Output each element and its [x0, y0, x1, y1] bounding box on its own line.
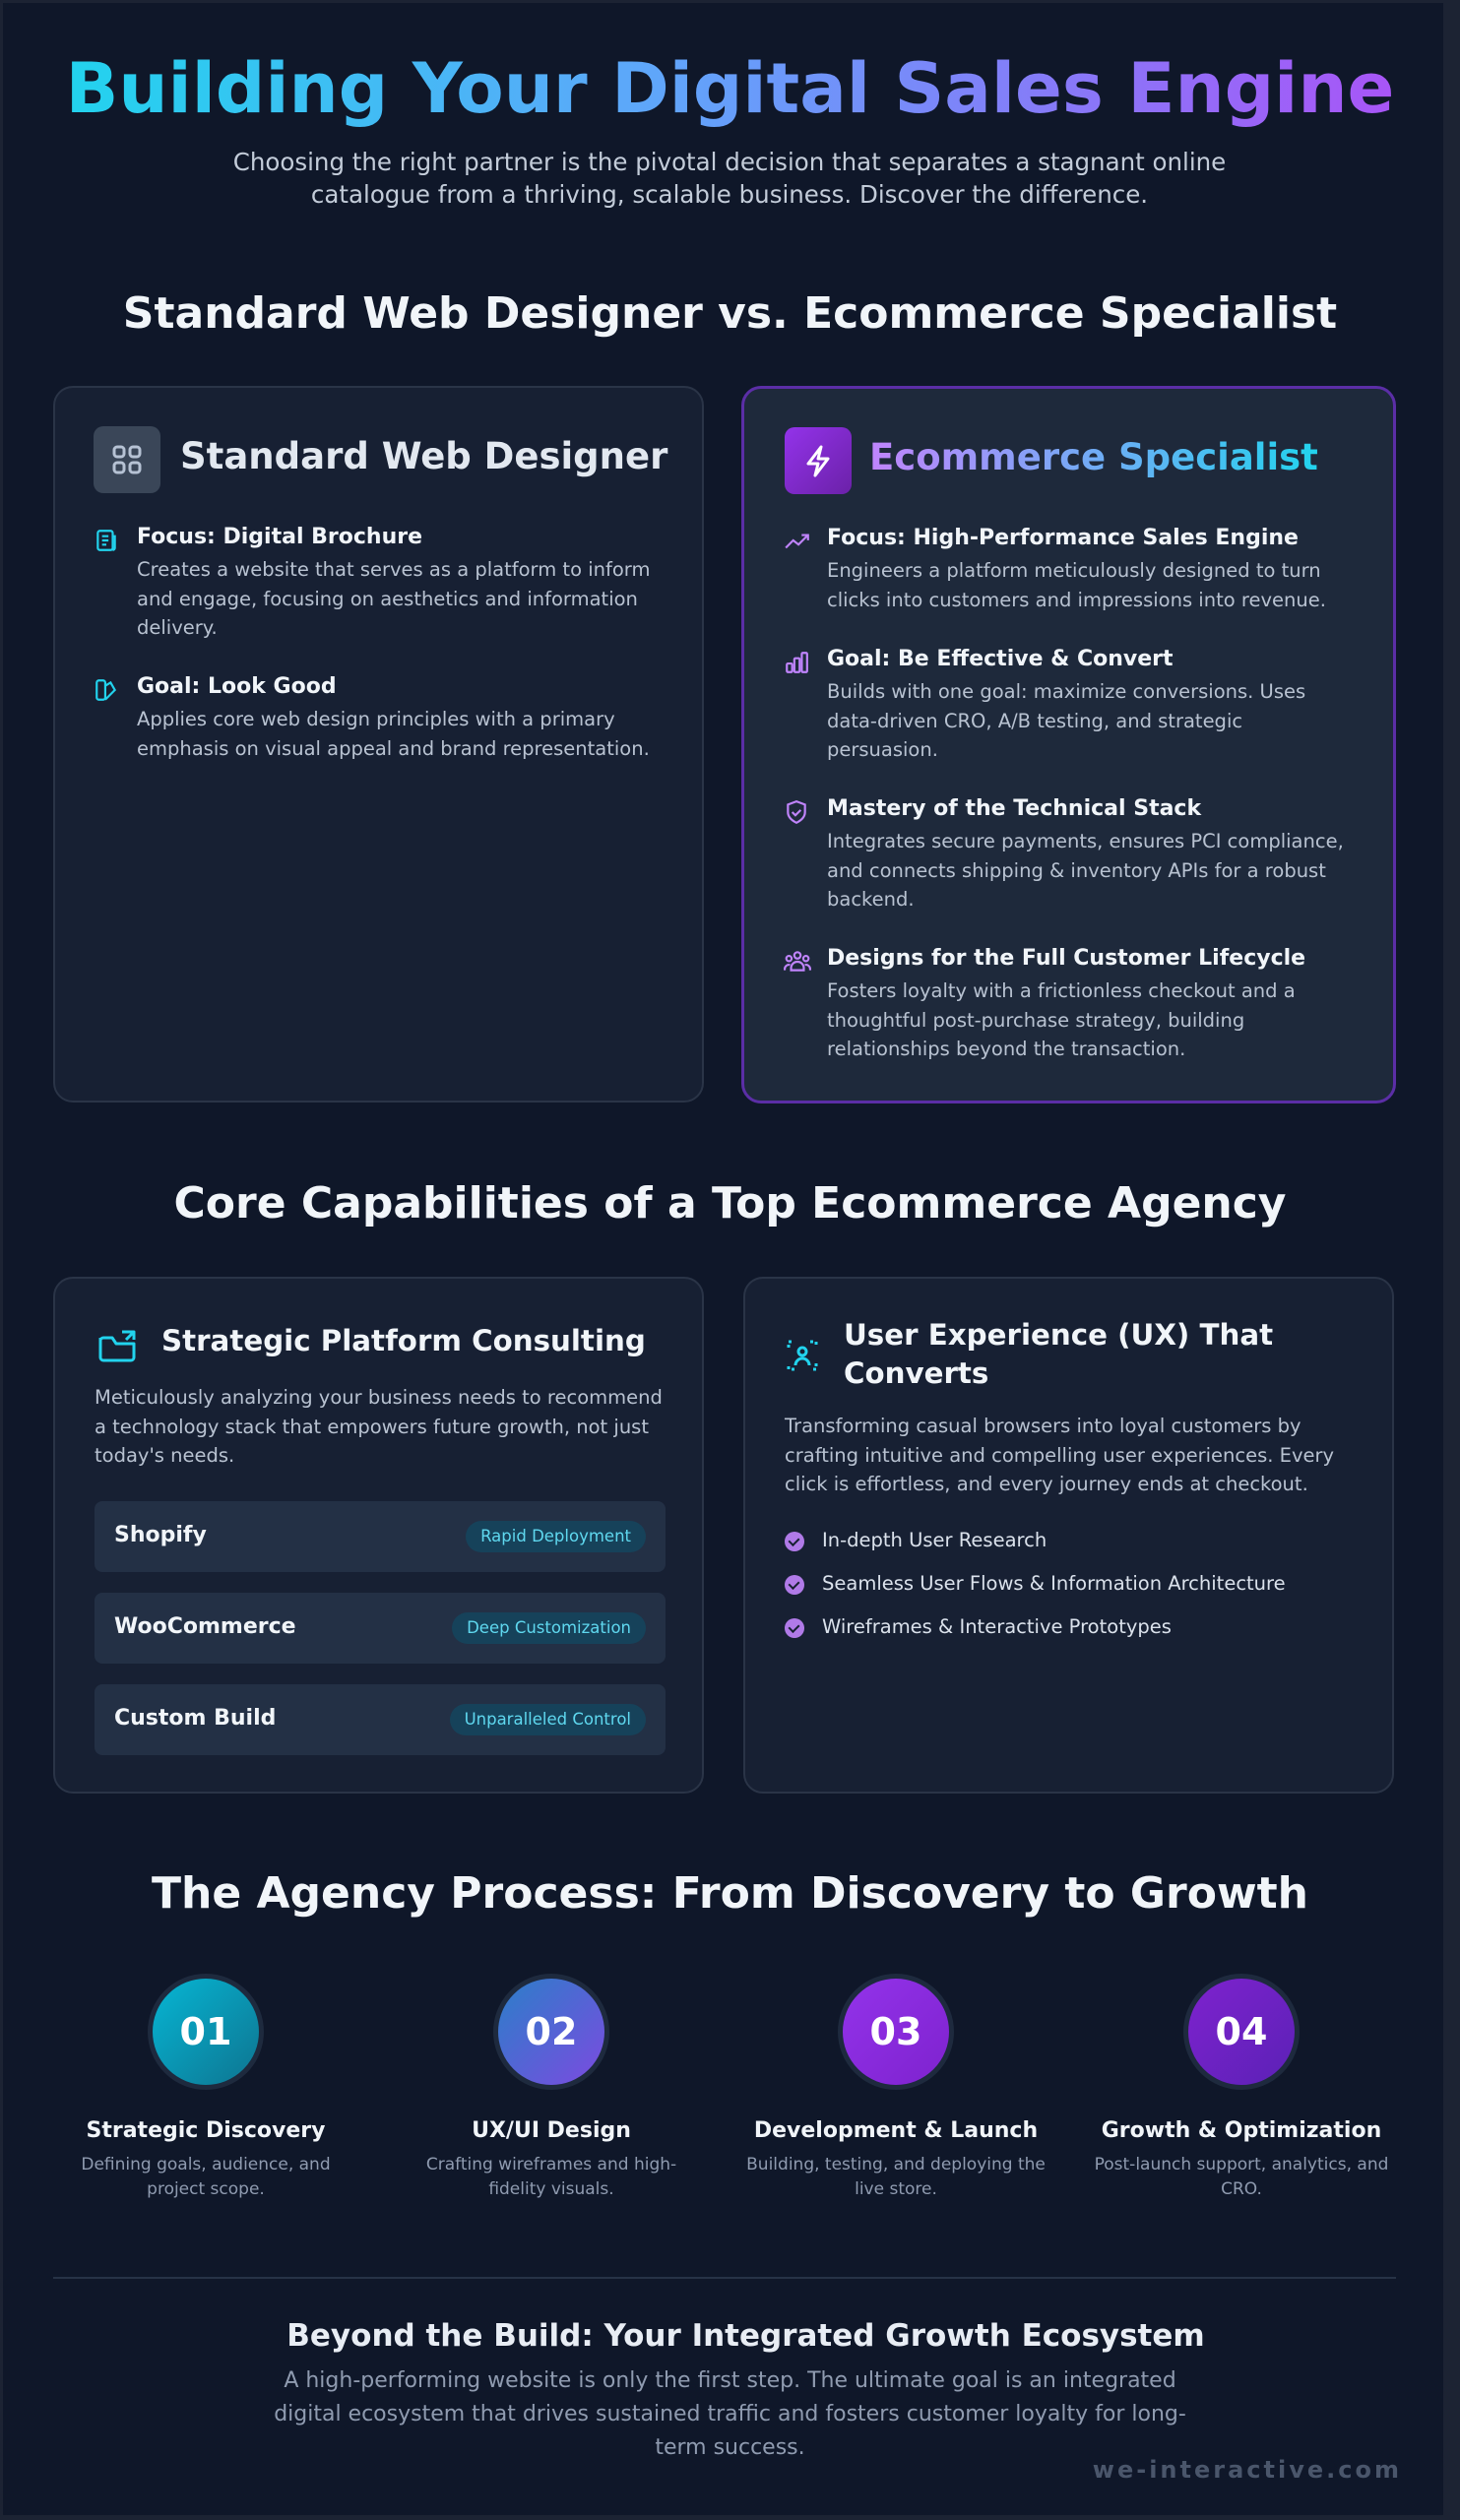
checklist: Wireframes & Interactive Prototypes: [822, 1615, 1172, 1638]
step 4: Growth & Optimization: [1102, 2118, 1381, 2143]
step 4: Post-launch support, analytics, and CRO.: [1095, 2155, 1388, 2199]
panel: ux that converts: [743, 1277, 1394, 1794]
watermark: we-interactive.com: [1093, 2456, 1402, 2484]
row: shopify: Rapid Deployment: [480, 1527, 631, 1545]
heading: core capabilities: Core Capabilities of a Top Ecommerce Agency: [173, 1178, 1286, 1228]
item: focus sales engine: [786, 526, 1326, 610]
step 1: [81, 1974, 331, 2199]
panel: ecommerce specialist: [741, 386, 1396, 1103]
row: woocommerce: WooCommerce: [114, 1614, 296, 1639]
checklist: [785, 1529, 1286, 1638]
step 2: 02: [526, 2010, 577, 2053]
description: Transforming casual browsers into loyal customers by crafting intuitive and compelling user experiences. Every click is effortless, and every journey ends at checkout.: [785, 1415, 1334, 1495]
icon: lightning: [785, 427, 852, 494]
row: custom build: [95, 1684, 666, 1755]
item: goal convert: [786, 647, 1305, 761]
step 3: [746, 1974, 1046, 2199]
panel: ecommerce specialist: Builds with one goal: maximize conversions. Uses data-driven CRO, A/B testing, and strategic persuasion.: [827, 680, 1305, 761]
panel: platform consulting: [53, 1277, 704, 1794]
panel: standard web designer: Focus: Digital Brochure: [137, 525, 422, 549]
panel: standard web designer: Applies core web design principles with a primary emphasis on visual appeal and brand representation.: [137, 708, 650, 760]
title: Building Your Digital Sales Engine: [66, 48, 1394, 129]
step 1: Strategic Discovery: [87, 2118, 325, 2143]
item: technical stack: [787, 796, 1344, 911]
item: focus brochure: [96, 525, 650, 639]
panel: ecommerce specialist: Engineers a platform meticulously designed to turn clicks into customers and impressions into revenue.: [827, 559, 1326, 610]
panel: ecommerce specialist: Fosters loyalty with a frictionless checkout and a thoughtful post-purchase strategy, building relationships beyond the transaction.: [827, 979, 1296, 1060]
card heading: Strategic Platform Consulting: [161, 1324, 646, 1357]
panel: ecommerce specialist: Mastery of the Technical Stack: [827, 796, 1201, 821]
icon: folder sync: [98, 1331, 136, 1362]
card heading: Standard Web Designer: [180, 435, 667, 477]
step 3: 03: [870, 2010, 921, 2053]
item: customer lifecycle: [784, 946, 1305, 1060]
card heading: User Experience (UX) That Converts: [844, 1318, 1273, 1390]
icon: grid: [94, 426, 160, 493]
panel: standard web designer: Goal: Look Good: [137, 674, 337, 699]
step 3: Building, testing, and deploying the live store.: [746, 2155, 1046, 2199]
row: woocommerce: Deep Customization: [467, 1618, 631, 1637]
panel: ecommerce specialist: Integrates secure payments, ensures PCI compliance, and connects shipping & inventory APIs for a robust backend.: [827, 830, 1344, 911]
icon: ux target: [788, 1341, 817, 1370]
step 4: [1095, 1974, 1388, 2199]
subtitle: Choosing the right partner is the pivotal decision that separates a stagnant online catalogue from a thriving, scalable business. Discover the difference.: [233, 148, 1226, 209]
card heading: Ecommerce Specialist: [869, 436, 1318, 478]
description: Meticulously analyzing your business needs to recommend a technology stack that empowers future growth, not just today's needs.: [95, 1386, 663, 1467]
checklist: Seamless User Flows & Information Architecture: [822, 1572, 1286, 1595]
panel: standard web designer: [53, 386, 704, 1102]
step 2: UX/UI Design: [472, 2118, 631, 2143]
checklist: In-depth User Research: [822, 1529, 1047, 1551]
heading: comparison: Standard Web Designer vs. Ecommerce Specialist: [123, 288, 1337, 339]
panel: standard web designer: Creates a website that serves as a platform to inform and engage, focusing on aesthetics and information delivery.: [137, 558, 650, 639]
step 1: Defining goals, audience, and project scope.: [81, 2155, 331, 2199]
step 2: Crafting wireframes and high-fidelity visuals.: [426, 2155, 676, 2199]
step 4: 04: [1216, 2010, 1267, 2053]
heading: agency process: The Agency Process: From Discovery to Growth: [152, 1868, 1308, 1919]
step 2: [426, 1974, 676, 2199]
step 3: Development & Launch: [754, 2118, 1038, 2143]
panel: ecommerce specialist: Goal: Be Effective & Convert: [827, 647, 1174, 671]
heading: beyond the build: Beyond the Build: Your Integrated Growth Ecosystem: [286, 2318, 1205, 2354]
item: goal look good: [95, 674, 650, 760]
row: custom build: Custom Build: [114, 1706, 276, 1731]
row: shopify: [95, 1501, 666, 1572]
closing text: A high-performing website is only the first step. The ultimate goal is an integrated digital ecosystem that drives sustained traffic and fosters customer loyalty for long-term success.: [274, 2368, 1186, 2460]
panel: ecommerce specialist: Focus: High-Performance Sales Engine: [827, 526, 1299, 550]
step 1: 01: [180, 2010, 231, 2053]
panel: ecommerce specialist: Designs for the Full Customer Lifecycle: [827, 946, 1305, 971]
row: woocommerce: [95, 1593, 666, 1664]
row: shopify: Shopify: [114, 1523, 207, 1547]
row: custom build: Unparalleled Control: [465, 1710, 631, 1729]
